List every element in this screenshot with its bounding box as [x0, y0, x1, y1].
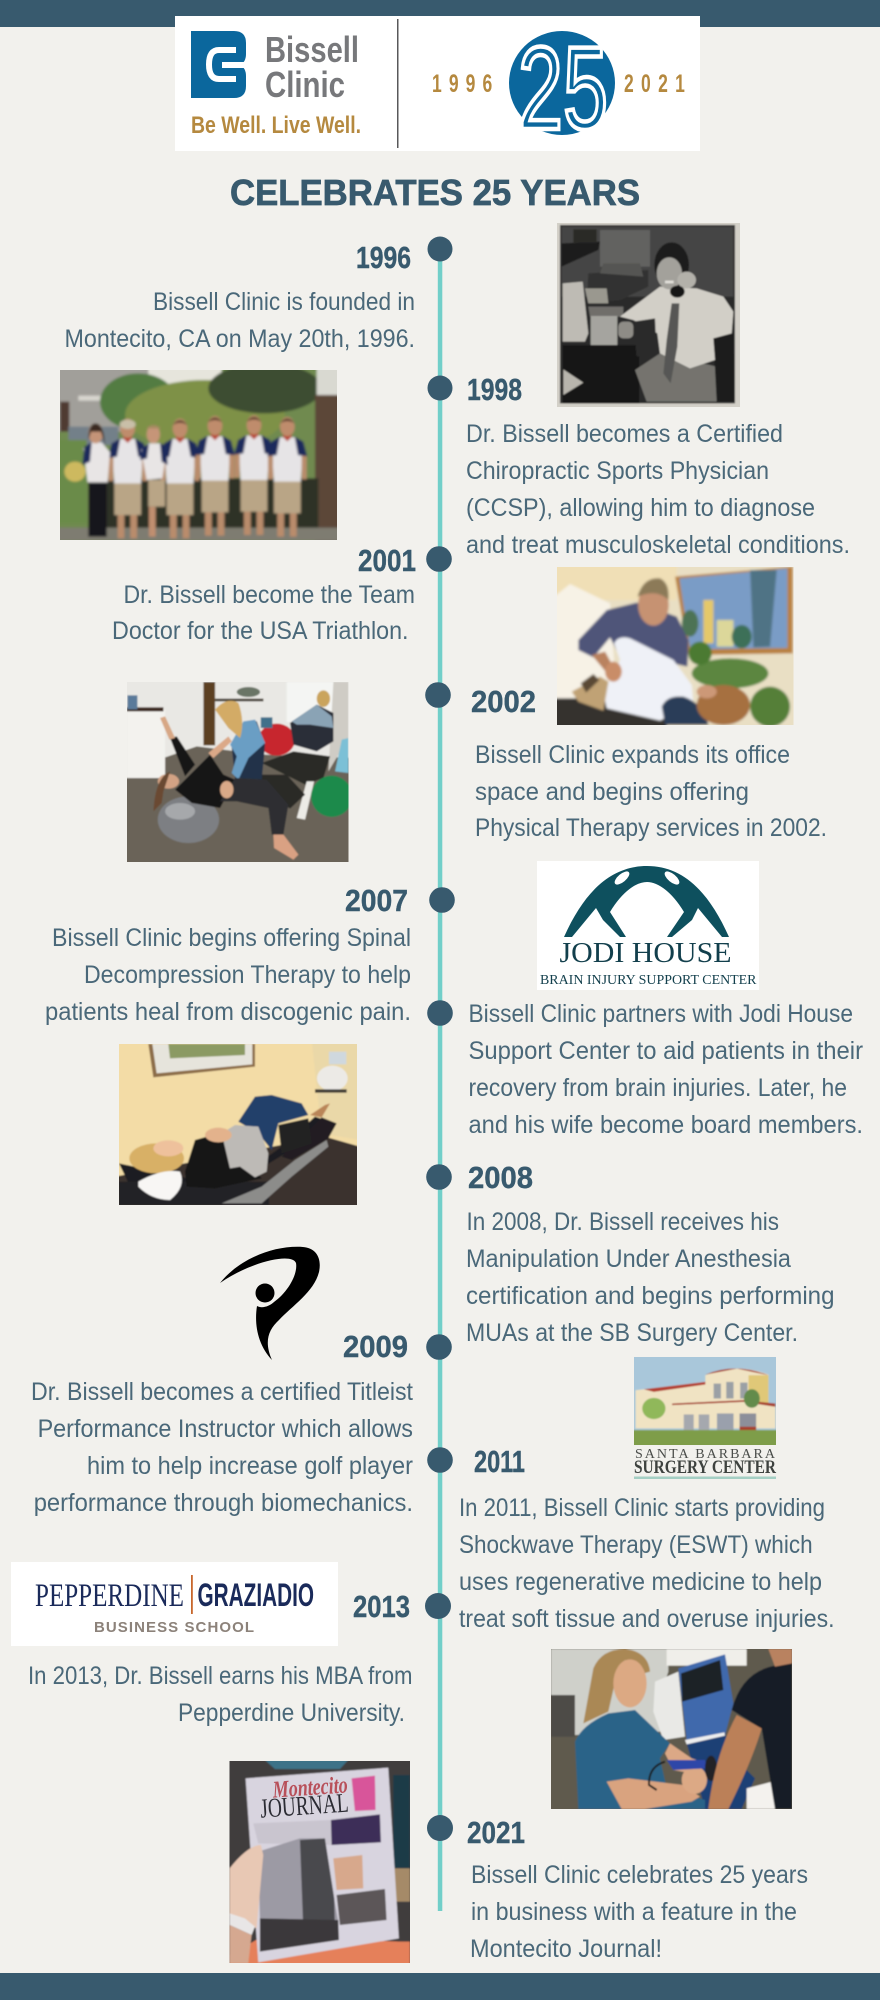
year: 2011: 2011 — [474, 1444, 525, 1479]
photo: physical therapy on exercise ball — [127, 682, 348, 862]
bottom bar — [0, 1973, 880, 2000]
text: 2013 — [28, 1662, 412, 1727]
text: 2011: Shockwave Therapy (ESWT) which — [459, 1531, 813, 1559]
text: 2021: Bissell Clinic celebrates 25 years — [471, 1861, 808, 1889]
text: 2009: him to help increase golf player — [87, 1452, 413, 1480]
title: CELEBRATES 25 YEARS — [230, 172, 640, 213]
logo tagline: Be Well. Live Well. — [191, 112, 361, 139]
Jodi House subtitle: BRAIN INJURY SUPPORT CENTER — [540, 973, 757, 988]
text: 1996: Bissell Clinic is founded in — [153, 288, 415, 316]
timeline line — [438, 249, 442, 1911]
year: 1996: 1996 — [356, 240, 411, 275]
text: 2001: Doctor for the USA Triathlon. — [112, 617, 408, 645]
text: 2011: treat soft tissue and overuse injuries. — [459, 1605, 834, 1633]
text: 2002: Bissell Clinic expands its office — [475, 741, 790, 769]
text: 2011: In 2011, Bissell Clinic starts providing — [459, 1494, 825, 1522]
text: 2008: MUAs at the SB Surgery Center. — [466, 1319, 798, 1347]
year: 2021: 2021 — [467, 1815, 525, 1850]
year: 2009: 2009 — [343, 1329, 408, 1364]
masthead Montecito: Montecito — [271, 1772, 348, 1804]
text: 2011: uses regenerative medicine to help — [459, 1568, 822, 1596]
Santa Barbara wordmark: SANTA BARBARA — [635, 1447, 776, 1462]
text: 2002 — [475, 741, 827, 842]
year: 2007: 2007 — [345, 883, 408, 918]
text: 1998: and treat musculoskeletal conditions. — [466, 531, 850, 559]
text: 2009 — [31, 1378, 413, 1517]
year: 1998: 1998 — [467, 372, 522, 407]
masthead Journal: JOURNAL — [259, 1788, 349, 1824]
year: 2008: 2008 — [468, 1160, 533, 1195]
logo end year: 2021 — [624, 69, 685, 98]
text: 2009: Performance Instructor which allows — [38, 1415, 413, 1443]
year: 2001: 2001 — [358, 543, 416, 578]
text: 2007: Bissell Clinic begins offering Spinal — [52, 924, 411, 952]
year: 2002: 2002 — [471, 684, 536, 719]
text: Jodi House partnership: Bissell Clinic partners with Jodi House — [468, 1000, 853, 1028]
text: 2009: performance through biomechanics. — [34, 1489, 413, 1517]
Surgery Center wordmark: SURGERY CENTER — [634, 1457, 776, 1478]
text: 2007: patients heal from discogenic pain. — [45, 998, 411, 1026]
icon: Bissell Clinic B mark — [191, 31, 246, 98]
photo: chiropractic adjustment — [557, 567, 794, 725]
text: 2008: Manipulation Under Anesthesia — [466, 1245, 791, 1273]
top bar — [0, 0, 880, 27]
logo: Santa Barbara Surgery Center — [631, 1352, 780, 1479]
logo start year: 1996 — [432, 69, 492, 98]
text: 2008: In 2008, Dr. Bissell receives his — [466, 1208, 779, 1236]
text: 1998: Dr. Bissell becomes a Certified — [466, 420, 783, 448]
icon: 25 anniversary emblem: 25 — [518, 23, 608, 155]
building illustration — [634, 1357, 776, 1445]
Jodi House name: JODI HOUSE — [560, 937, 732, 969]
text: 1998: (CCSP), allowing him to diagnose — [466, 494, 815, 522]
logo wordmark: Clinic — [265, 64, 345, 105]
Graziadio name: GRAZIADIO — [198, 1577, 314, 1613]
text: Jodi House partnership: recovery from brain injuries. Later, he — [468, 1074, 847, 1102]
text: 2021: Montecito Journal! — [470, 1935, 662, 1963]
text: 2021 — [470, 1861, 808, 1963]
text: 1998 — [466, 420, 850, 559]
photo: USA Triathlon team — [60, 370, 337, 540]
text: 2002: space and begins offering — [475, 778, 749, 806]
text: Jodi House partnership: Support Center to aid patients in their — [468, 1037, 863, 1065]
text: 1996 — [64, 288, 415, 353]
logo: Jodi House — [537, 861, 759, 990]
text: 2021: in business with a feature in the — [471, 1898, 797, 1926]
photo: spinal decompression — [119, 1044, 357, 1205]
text: 2013: Pepperdine University. — [178, 1699, 405, 1727]
text: 2007: Decompression Therapy to help — [84, 961, 411, 989]
logo panel — [175, 16, 700, 155]
photo: Dr. Bissell 1996 black and white — [557, 223, 740, 407]
photo: shockwave therapy — [551, 1649, 792, 1809]
timeline markers — [425, 236, 455, 1841]
text: Jodi House partnership — [468, 1000, 863, 1139]
logo: Titleist Performance Institute — [220, 1247, 320, 1360]
text: 2008: certification and begins performing — [466, 1282, 834, 1310]
logo wordmark — [265, 29, 359, 105]
text: 2001: Dr. Bissell become the Team — [124, 581, 415, 609]
text: 2002: Physical Therapy services in 2002. — [475, 814, 827, 842]
logo divider — [397, 19, 398, 148]
icon: Jodi House arch — [564, 866, 729, 937]
text: Jodi House partnership: and his wife become board members. — [468, 1111, 863, 1139]
text: 2008 — [466, 1208, 834, 1347]
text: 2007 — [45, 924, 411, 1026]
text: 2011 — [459, 1494, 834, 1633]
Business School: BUSINESS SCHOOL — [94, 1619, 254, 1636]
text: 2001 — [112, 581, 415, 645]
text: 2009: Dr. Bissell becomes a certified Titleist — [31, 1378, 413, 1406]
text: 1998: Chiropractic Sports Physician — [466, 457, 769, 485]
logo: Pepperdine Graziadio — [11, 1562, 338, 1646]
text: 1996: Montecito, CA on May 20th, 1996. — [64, 325, 415, 353]
icon: 25 anniversary emblem — [509, 23, 615, 155]
photo: Montecito Journal newspaper — [230, 1761, 410, 1963]
year: 2013: 2013 — [353, 1589, 410, 1624]
logo wordmark: Bissell — [265, 29, 359, 70]
Pepperdine name: PEPPERDINE — [35, 1578, 184, 1614]
text: 2013: In 2013, Dr. Bissell earns his MBA from — [28, 1662, 412, 1690]
